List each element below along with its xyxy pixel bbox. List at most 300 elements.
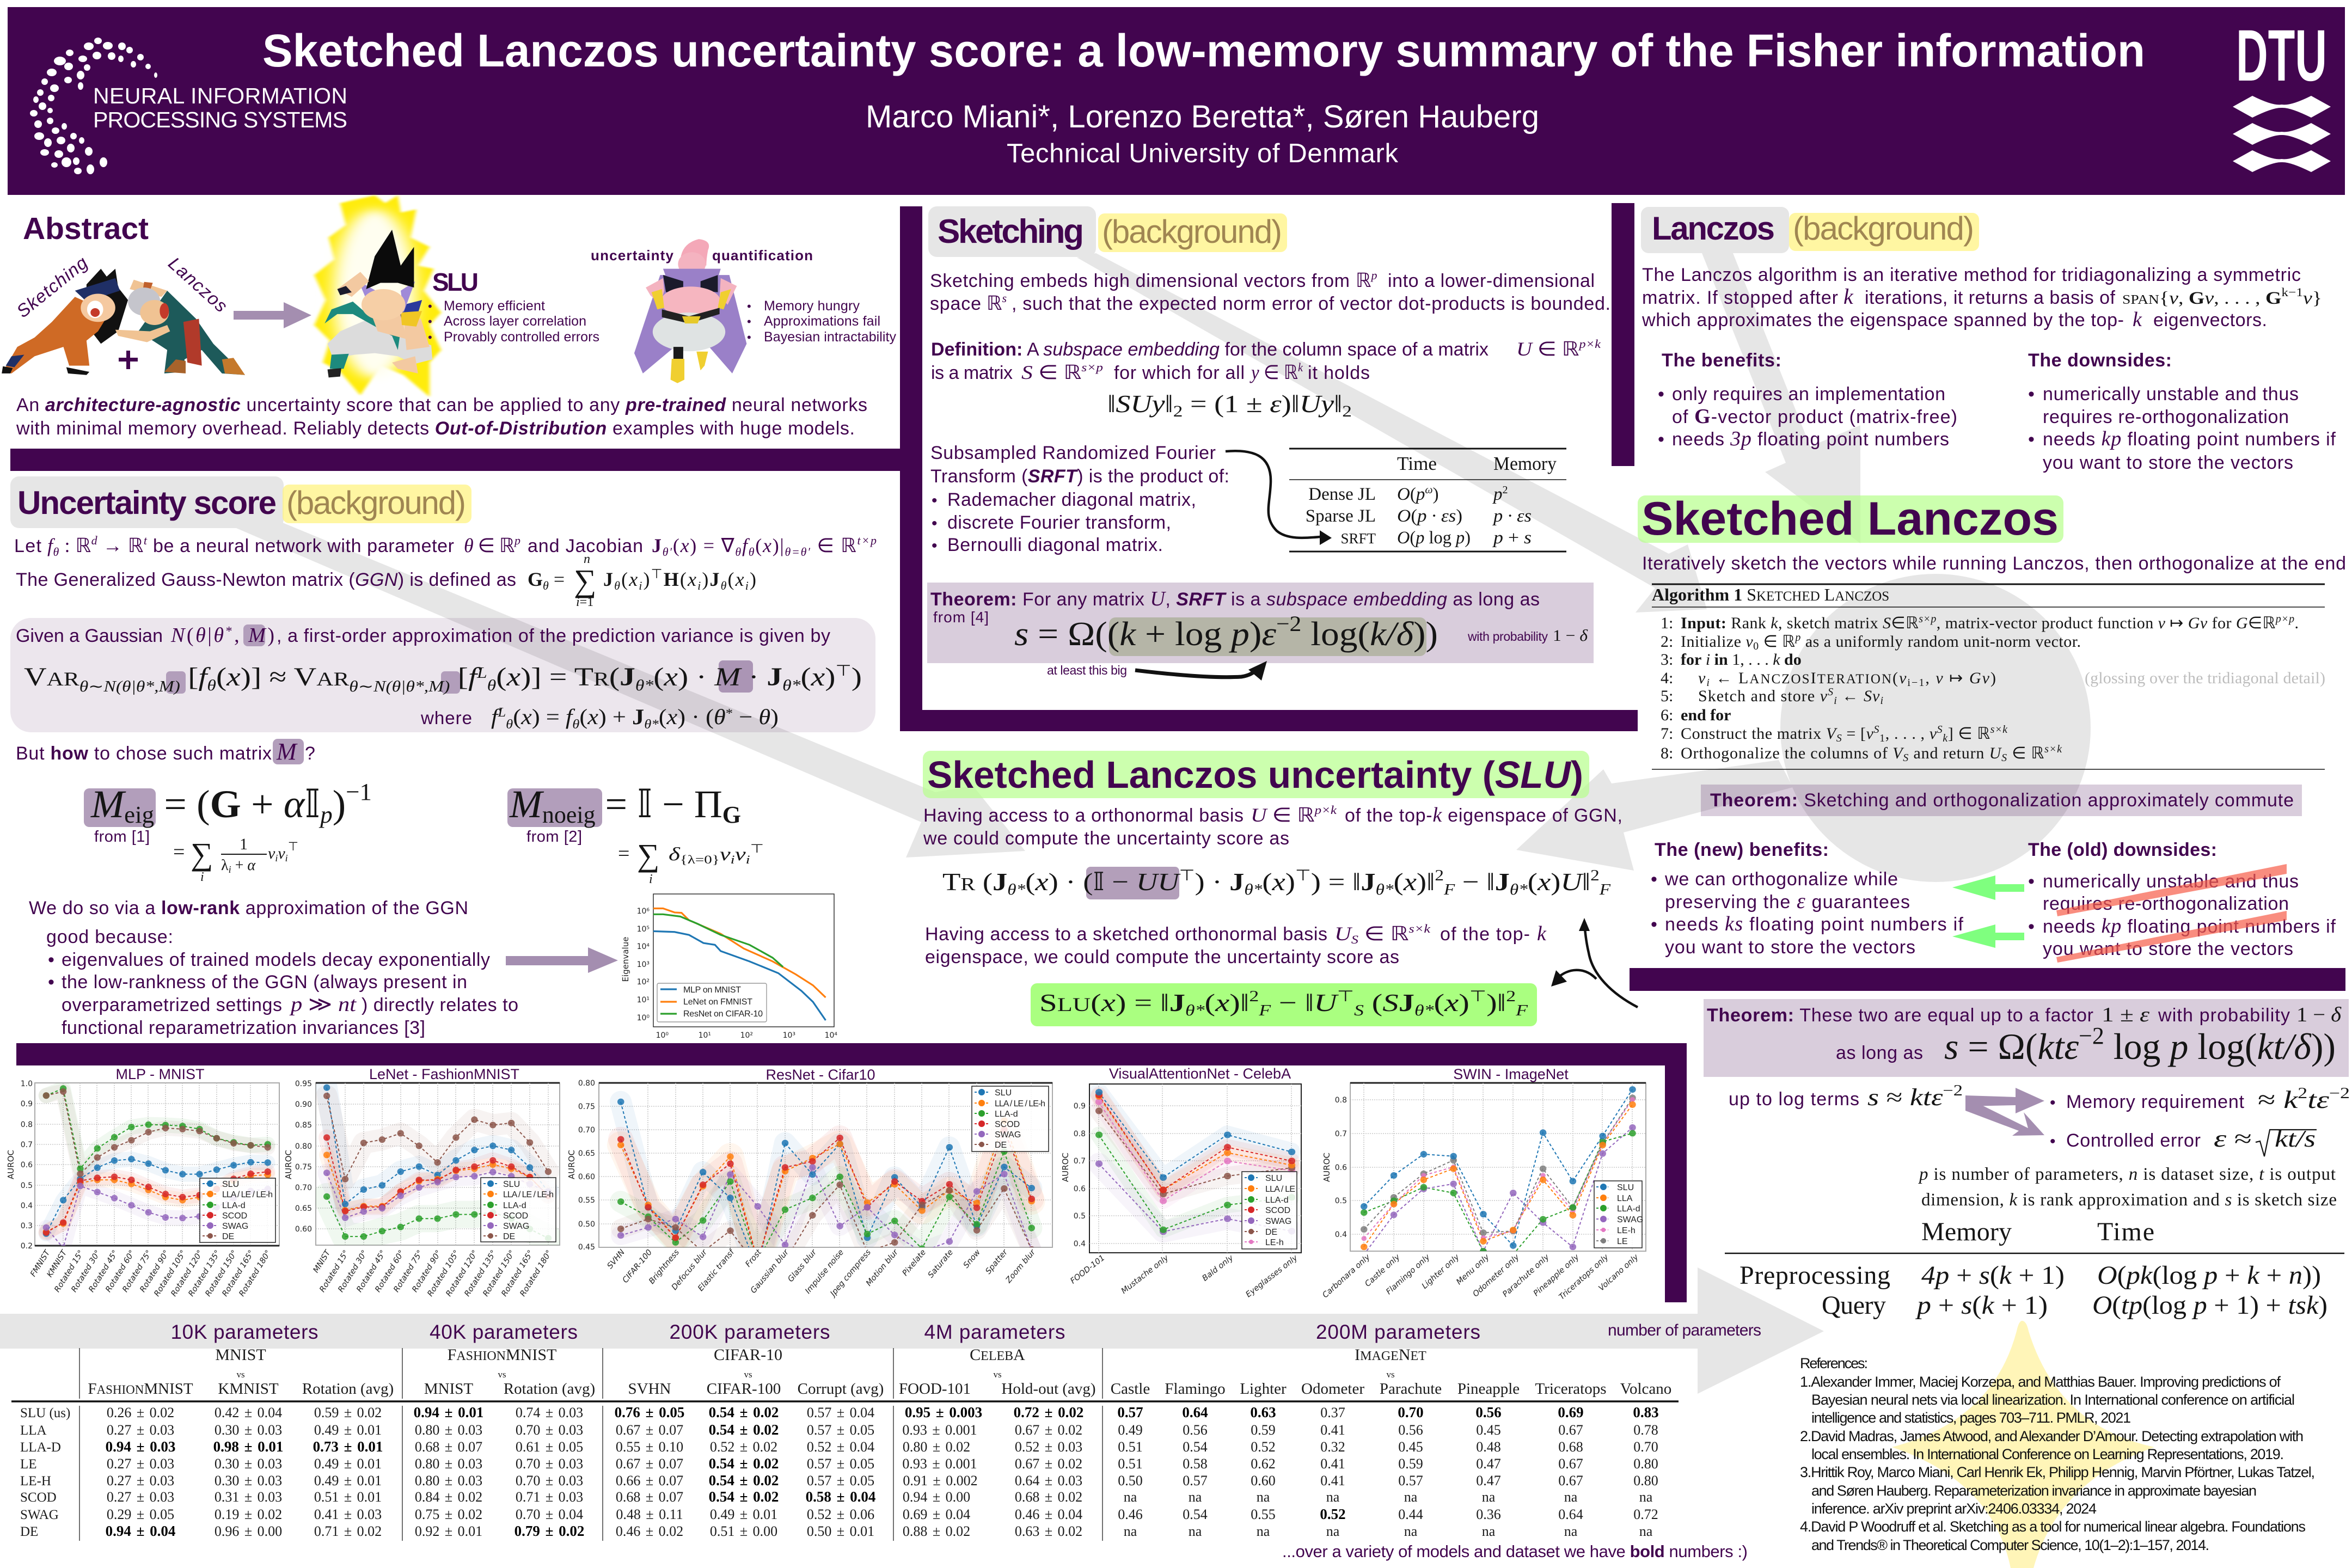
algorithm box: S (1836, 732, 1842, 744)
Lanczos description: eigenvectors. (2153, 310, 2267, 330)
row: SWAG: 0.75 ± 0.02 (415, 1506, 482, 1522)
table header: out-of-distribution datasets: Odometer (1301, 1380, 1364, 1398)
legend (657, 983, 767, 1022)
algorithm box: Input: Rank k, sketch matrix S∈ℝ (1681, 614, 1919, 632)
algorithm box: Orthogonalize the columns of V (1681, 744, 1902, 762)
x axis labels: Frost (744, 1247, 764, 1269)
memory and error bounds: −2 (2329, 1085, 2350, 1102)
definition: GGN: x (628, 568, 638, 590)
NeurIPS logo: PROCESSING SYSTEMS (93, 107, 347, 132)
formula: SLU definition: S (1354, 1002, 1364, 1019)
table: sketching methods: p (1493, 485, 1503, 504)
formula: variance approximation: x) · M · J (664, 663, 780, 691)
algorithm box: 4: (1661, 669, 1673, 687)
row: DE: 0.63 ± 0.02 (1015, 1523, 1082, 1539)
algorithm box: i (1834, 695, 1837, 707)
SRFT description: • (932, 492, 938, 510)
row: LE: 0.67 (1558, 1456, 1583, 1472)
line: given a Gaussian: , a first-order approximation of the prediction variance is given by (277, 626, 830, 646)
x axis labels: Lighter only (1420, 1253, 1461, 1291)
formula: SLU definition: ( (1364, 989, 1382, 1016)
definition: GGN: G (528, 568, 543, 590)
formula: linearized model: x) + J (587, 705, 643, 729)
row: SLU: 0.83 (1633, 1404, 1659, 1420)
formula: norm preservation: 2 (1173, 402, 1183, 420)
legend: DE (503, 1232, 515, 1241)
text: sketched basis: Having access to a sketched orthonormal basis (925, 924, 1327, 945)
line: given a Gaussian: , (234, 624, 240, 647)
panel: uncertainty score (10, 476, 877, 1040)
SLU properties list: • (428, 315, 432, 328)
y axis labels: 0.45 (578, 1243, 595, 1252)
algorithm box: for i in 1, . . . k do (1681, 651, 1802, 669)
row: LE: 0.80 ± 0.03 (415, 1456, 482, 1472)
x axis labels: Spatter (984, 1247, 1010, 1276)
y axis labels: 0.8 (21, 1120, 33, 1129)
row: LE: 0.80 (1633, 1456, 1658, 1472)
x axis labels: Gaussian blur (749, 1248, 791, 1295)
row: LE-H: 0.57 (1398, 1473, 1423, 1489)
table header: vs: vs (993, 1369, 1002, 1380)
list: old downsides: • (2028, 916, 2035, 937)
abstract text: with minimal memory overhead. Reliably detects Out-of-Distribution examples with huge models. (16, 418, 855, 439)
Lanczos description: v (2303, 289, 2312, 308)
labels: uncertainty quantification (591, 247, 813, 264)
formula: M eig: + (231, 857, 247, 874)
y axis labels: 0.75 (578, 1102, 595, 1111)
formula: variance approximation: x)] = T R(J (506, 663, 633, 691)
definition: GGN: x (735, 568, 744, 590)
x axis labels: Rotated 15° (53, 1249, 85, 1294)
theorem box: SRFT (927, 583, 1594, 663)
formula: trace identity: ⊤ (1179, 867, 1195, 884)
algorithm box: S (1828, 686, 1833, 698)
table: sketching methods: ) (1432, 485, 1438, 504)
row: LLA-D: 0.61 ± 0.05 (516, 1439, 583, 1455)
y axis labels: AUROC (1061, 1153, 1070, 1182)
text: orthonormal basis (923, 803, 1622, 849)
row: SWAG: 0.41 ± 0.03 (314, 1506, 382, 1522)
row: DE: na (1639, 1523, 1653, 1539)
formula: linearized model: L (497, 706, 506, 720)
y axis labels: 0.5 (1335, 1197, 1347, 1205)
legend: SLU (995, 1088, 1012, 1098)
y axis labels: 0.3 (21, 1222, 33, 1230)
row: LLA: 0.56 (1398, 1422, 1423, 1438)
list: old downsides: • (2028, 871, 2035, 892)
formula: trace identity: x)‖ (1404, 868, 1432, 896)
formula: linearized model: − (733, 705, 758, 729)
list: new benefits: we can orthogonalize while (1664, 869, 1898, 890)
SLU properties list: Across layer correlation (444, 314, 586, 329)
row: SCOD: na (1564, 1489, 1578, 1505)
row: LE-H: 0.57 (1183, 1473, 1208, 1489)
row: LLA-D: 0.52 ± 0.03 (1015, 1439, 1082, 1455)
y axis labels (567, 1079, 595, 1252)
algorithm box: v (1698, 669, 1706, 687)
definition: neural network and Jacobian: t×p (857, 534, 877, 547)
arrow: SRFT to table row (1226, 451, 1332, 545)
note: variable definitions (1918, 1165, 2337, 1210)
x axis labels: FMNIST (29, 1248, 52, 1278)
axes labels: 10¹ (637, 996, 650, 1004)
formula: M noeig: i (746, 853, 750, 866)
definition: neural network and Jacobian: x) = ∇ (681, 535, 734, 556)
formula: trace identity: ( (1394, 868, 1404, 896)
memory and error bounds (2050, 1085, 2350, 1156)
formula: M noeig: = 𝕀 − Π (596, 782, 722, 826)
text: up to log terms: up to log terms (1729, 1089, 1859, 1110)
row: SWAG: 0.48 ± 0.11 (616, 1506, 683, 1522)
formula: trace identity: ( (1528, 868, 1538, 896)
algorithm box: as a uniformly random unit-norm vector. (1801, 633, 2081, 651)
formula: variance approximation: θ∼N(θ|θ*,M) (349, 678, 450, 695)
theorem box: SRFT: with probability (1467, 629, 1548, 644)
formula: M noeig: M (509, 782, 544, 826)
row: LE-H: 0.91 ± 0.002 (903, 1473, 978, 1489)
theorem box: equivalence: Theorem: These two are equal up to a factor (1707, 1005, 2093, 1026)
formula: SLU definition: )‖ (1486, 989, 1506, 1016)
formula: variance approximation: f (198, 663, 211, 691)
formula: SLU definition: ⊤ (1469, 988, 1486, 1005)
algorithm box: S (1874, 724, 1879, 736)
row: LE: 0.51 (1118, 1456, 1143, 1472)
definition: neural network and Jacobian: θ (749, 545, 755, 559)
definition: neural network and Jacobian: and Jacobian (528, 536, 643, 556)
row: SCOD: 0.94 ± 0.00 (903, 1489, 970, 1505)
panel: sketching (927, 206, 1610, 681)
question: how to choose M: ? (305, 743, 315, 764)
row: LLA-D: 0.52 ± 0.02 (710, 1439, 777, 1455)
legend: SCOD (1265, 1206, 1290, 1215)
NeurIPS logo (30, 38, 347, 174)
abstract text (16, 395, 867, 439)
row: SCOD: na (1257, 1489, 1270, 1505)
formula: trace identity: ) · (1195, 868, 1229, 896)
arrow: fusion to SLU (234, 302, 311, 328)
theorem box: equivalence: with probability (2158, 1005, 2290, 1026)
x axis labels: Odometer only (1471, 1253, 1521, 1299)
formula: M eig: i (200, 870, 204, 884)
list: benefits: • (1658, 429, 1664, 450)
algorithm box: 5: (1661, 687, 1673, 705)
algorithm box: . (2294, 614, 2299, 632)
table: sketching methods: Memory (1493, 453, 1557, 474)
text: sketched basis (925, 922, 1547, 967)
formula: norm preservation: 2 (1342, 402, 1352, 420)
formula: trace identity: x)U‖ (1538, 868, 1589, 896)
arrows: downsides replaced by benefits (1952, 875, 2024, 948)
definition: neural network and Jacobian: d (91, 534, 98, 547)
x axis labels: Rotated 105° (152, 1249, 188, 1298)
x axis labels: Parachute only (1501, 1253, 1551, 1299)
SRFT description (930, 443, 1229, 555)
definition: subspace embedding: is a matrix (931, 363, 1013, 383)
row: LE-H: 0.41 (1320, 1473, 1345, 1489)
formula: linearized model: ( (513, 705, 521, 729)
formula: M eig: ∑ (191, 836, 213, 872)
list: downsides: requires re-orthogonalization (2043, 407, 2289, 427)
parameter-count labels: number of parameters (1608, 1321, 1761, 1339)
villain properties list: • (747, 330, 751, 344)
row: SWAG: 0.52 ± 0.06 (807, 1506, 874, 1522)
formula: variance approximation: [ (180, 663, 198, 691)
x axis labels: Volcano only (1597, 1253, 1640, 1293)
list: new benefits: The (new) benefits: (1655, 840, 1829, 860)
formula: SLU definition: U (1314, 989, 1339, 1016)
formula: M noeig: δ (669, 844, 681, 865)
heading: Sketching (background): Sketching (938, 213, 1084, 250)
SRFT description: Rademacher diagonal matrix, (947, 489, 1196, 510)
memory and error bounds: • (2050, 1094, 2056, 1112)
SLU properties list (428, 298, 599, 345)
row: SCOD: na (1639, 1489, 1653, 1505)
algorithm box: Construct the matrix V (1681, 725, 1836, 743)
formula: SLU definition: ( (1205, 989, 1215, 1016)
algorithm box: end for (1681, 706, 1731, 724)
row: SWAG: 0.55 (1251, 1506, 1276, 1522)
x axis labels: Rotated 45° (87, 1249, 120, 1294)
formula: M noeig: i (731, 853, 735, 866)
formula: variance approximation: θ (487, 677, 497, 694)
algorithm box: s×p (1919, 613, 1936, 625)
definition: neural network and Jacobian: θ (735, 545, 741, 559)
SRFT description: discrete Fourier transform, (947, 512, 1171, 533)
y axis labels: 0.65 (295, 1204, 312, 1213)
definition: GGN: θ (721, 579, 727, 592)
algorithm box: p (1794, 632, 1800, 644)
algorithm box: v (1930, 725, 1937, 743)
villain properties list (747, 298, 896, 345)
algorithm box: U (1989, 744, 2002, 762)
algorithm box: s×k (1990, 724, 2008, 736)
table: sketching methods (1289, 449, 1566, 552)
algorithm box: ] ∈ ℝ (1948, 725, 1990, 743)
line: given a Gaussian: M) (248, 624, 274, 647)
row: LE: 0.30 ± 0.03 (215, 1456, 282, 1472)
abstract text: An architecture-agnostic uncertainty score that can be applied to any pre-trained neural networks (16, 395, 867, 415)
references (1800, 1355, 2315, 1553)
text: low-rank approximation: ) directly relates to (362, 995, 518, 1015)
list: new benefits: • (1651, 914, 1657, 935)
parameter-count labels: 200K parameters (670, 1321, 830, 1343)
text: low-rank approximation: functional reparametrization invariances [3] (62, 1018, 425, 1038)
Lanczos description: k (2133, 308, 2142, 331)
axes labels: Eigenvalue (621, 937, 630, 982)
table header: out-of-distribution datasets: Lighter (1240, 1380, 1287, 1398)
list: benefits: • (1658, 384, 1664, 405)
row: DE: na (1482, 1523, 1496, 1539)
text: low-rank approximation: good because: (46, 927, 173, 947)
row: SCOD: na (1482, 1489, 1496, 1505)
row: SCOD: 0.84 ± 0.02 (415, 1489, 482, 1505)
y axis labels: 0.65 (578, 1149, 595, 1158)
formula: trace identity: x) · (𝕀 − UU (1035, 868, 1172, 896)
formula: M noeig: ∑ (637, 837, 659, 873)
definition: GGN: i (745, 579, 749, 592)
x axis labels (606, 1247, 1038, 1299)
table: sketching methods: Dense JL (1308, 485, 1376, 504)
list: new benefits (1651, 840, 1964, 958)
row: LE-H: 0.54 ± 0.02 (709, 1472, 779, 1489)
x axis labels: FOOD-101 (1069, 1254, 1106, 1285)
algorithm box: ∈ ℝ (1759, 633, 1795, 651)
text: low-rank approximation: • (48, 950, 54, 970)
definition: GGN: H (664, 568, 679, 590)
x axis labels: Rotated 75° (392, 1249, 425, 1294)
row: LLA-D: 0.98 ± 0.01 (213, 1438, 283, 1455)
y axis labels: 0.85 (295, 1121, 312, 1130)
formula: M eig: from [1] (94, 828, 150, 846)
formula: variance approximation: θ* (635, 677, 653, 694)
memory and error bounds: tε (2307, 1086, 2330, 1113)
heading: SLU: Sketched Lanczos uncertainty (SLU) (927, 754, 1583, 796)
row: DE: 0.92 ± 0.01 (415, 1523, 482, 1539)
legend: SCOD (995, 1120, 1020, 1129)
theorem box: equivalence: p log(kt/δ)) (2170, 1026, 2336, 1067)
definition: subspace embedding (931, 337, 1601, 383)
row: LLA-D: 0.52 ± 0.04 (807, 1439, 874, 1455)
x axis labels: Rotated 120° (444, 1249, 480, 1298)
algorithm box: s×k (2044, 743, 2062, 755)
axes labels: 10⁶ (637, 907, 650, 916)
formula: SLU definition (1031, 983, 1537, 1026)
algorithm box: i (1880, 695, 1883, 707)
y axis labels: 0.90 (295, 1100, 312, 1109)
definition: neural network and Jacobian: θ ∈ ℝ (464, 535, 515, 556)
row: LLA-D: 0.32 (1320, 1439, 1345, 1455)
text: up to log terms: s ≈ ktε (1867, 1084, 1937, 1111)
heading: Lanczos (background) (1641, 207, 1979, 253)
formula: trace identity: x) (1272, 868, 1294, 896)
definition: GGN: ) (644, 568, 650, 590)
definition: neural network and Jacobian: ( (755, 535, 762, 556)
panel: sketched Lanczos uncertainty (923, 751, 1638, 1026)
sketching description: into a lower-dimensional (1388, 271, 1595, 291)
row: SWAG: 0.29 ± 0.05 (107, 1506, 174, 1522)
formula: trace identity: θ* (1244, 881, 1262, 898)
legend: LeNet on FMNIST (683, 997, 752, 1007)
row: SLU: 0.74 ± 0.03 (516, 1405, 583, 1420)
y axis labels: 0.9 (21, 1100, 33, 1108)
list: downsides: you want to store the vectors (2043, 452, 2293, 473)
formula: variance approximation: ⊤ (836, 663, 852, 679)
SRFT description: Bernoulli diagonal matrix. (947, 535, 1163, 555)
theorem box: equivalence: log (2104, 1026, 2170, 1067)
formula: variance approximation: [ (450, 663, 468, 691)
theorem box: equivalence: −2 (2079, 1022, 2104, 1049)
Lanczos description (1641, 265, 2322, 331)
heading: Lanczos (background): (background) (1793, 210, 1974, 247)
definition: neural network and Jacobian: ∈ ℝ (811, 535, 856, 556)
table: sketching methods: SRFT (1340, 530, 1376, 547)
row: LLA: 0.70 ± 0.03 (516, 1422, 583, 1438)
row: DE: 0.50 ± 0.01 (807, 1523, 874, 1539)
definition: GGN: The Generalized Gauss-Newton matrix (GGN) is defined as (16, 569, 516, 590)
list: downsides (2028, 350, 2336, 473)
algorithm box: 7: (1661, 725, 1673, 743)
sketching description: Sketching embeds high dimensional vectors from (930, 271, 1350, 291)
text: sketched basis: of the top- (1440, 924, 1530, 945)
y axis labels: 0.60 (578, 1173, 595, 1181)
list: downsides: The downsides: (2028, 350, 2172, 371)
table: memory and time complexity: O(tp(log p + 1) + tsk) (2092, 1291, 2328, 1320)
formula: norm preservation: ε)‖Uy‖ (1270, 390, 1341, 418)
formula: variance approximation: ( (653, 663, 664, 691)
panel: Gaussian variance (10, 618, 875, 732)
formula: M noeig: v (720, 844, 731, 865)
row: DE: 0.51 ± 0.00 (710, 1523, 777, 1539)
y axis labels: 0.55 (578, 1196, 595, 1205)
x axis labels: MNIST (312, 1248, 333, 1275)
table header: vs: vs (498, 1369, 506, 1380)
row: SWAG: 0.49 ± 0.01 (710, 1506, 777, 1522)
y axis labels: AUROC (284, 1150, 293, 1179)
text: low-rank approximation (29, 898, 518, 1038)
villain properties list: Approximations fail (764, 314, 880, 329)
question: how to choose M (16, 738, 315, 765)
row: SLU: 0.59 ± 0.02 (314, 1405, 382, 1420)
axes labels: 10² (740, 1031, 753, 1040)
list: new benefits: you want to store the vectors (1665, 937, 1915, 958)
closing remark: ...over a variety of models and dataset we have bold numbers :) (1282, 1542, 1748, 1561)
formula: trace identity: TR (J (942, 868, 1005, 896)
definition: GGN: θ (614, 579, 620, 592)
row: LE: 0.62 (1251, 1456, 1276, 1472)
formula: M eig: λ (221, 857, 229, 874)
formula: linearized model: θ (572, 718, 580, 732)
formula: variance approximation: x)] ≈ V AR (226, 663, 344, 691)
formula: trace identity: ) = ‖ (1311, 868, 1361, 896)
text: orthonormal basis: Having access to a orthonormal basis (923, 805, 1244, 826)
text: sketched basis: U (1334, 923, 1349, 945)
y axis labels: 0.7 (1335, 1130, 1347, 1138)
row: LE: 0.54 ± 0.02 (709, 1455, 779, 1472)
SLU properties list: • (428, 330, 432, 344)
text: orthonormal basis: U ∈ ℝ (1251, 804, 1310, 826)
row: LLA-D: 0.51 (1118, 1439, 1143, 1455)
x axis labels: Rotated 90° (411, 1249, 443, 1294)
line: given a Gaussian: N(θ|θ (171, 624, 224, 647)
definition: GGN: θ (543, 579, 549, 592)
row: SCOD: na (1189, 1489, 1202, 1505)
algorithm box: ← L (1711, 669, 1748, 687)
chart: MLP - MNIST (6, 1066, 279, 1298)
row: LLA: 0.67 (1558, 1422, 1583, 1438)
algorithm box: 1: (1661, 614, 1673, 632)
row: LLA-D: 0.94 ± 0.03 (106, 1438, 175, 1455)
formula: M noeig: {λ=0} (680, 853, 720, 866)
definition: subspace embedding: for which for all (1114, 363, 1245, 383)
algorithm box: Sketch and store v (1698, 687, 1827, 705)
line: given a Gaussian: * (226, 624, 232, 639)
row: LE: 0.41 (1320, 1456, 1345, 1472)
algorithm box: 1 (1879, 732, 1885, 744)
formula: SLU definition: SJ (1382, 989, 1411, 1016)
list: old downsides: The (old) downsides: (2028, 840, 2217, 860)
Lanczos description: } (2312, 289, 2321, 308)
references: local ensembles. In International Conference on Learning Representations, 2019. (1811, 1446, 2284, 1462)
note: at least this big: at least this big (1047, 663, 1127, 677)
formula: SLU definition: 2 (1506, 988, 1516, 1005)
formula: M eig: v (268, 844, 275, 862)
x axis labels: Pineapple only (1532, 1253, 1581, 1298)
chart: VisualAttentionNet - CelebA (1061, 1065, 1301, 1299)
row: SCOD: 0.31 ± 0.03 (215, 1489, 282, 1505)
memory and error bounds: Memory requirement (2066, 1092, 2245, 1112)
y axis labels: 0.8 (1335, 1096, 1347, 1105)
row: LE-H: 0.80 (1633, 1473, 1658, 1489)
